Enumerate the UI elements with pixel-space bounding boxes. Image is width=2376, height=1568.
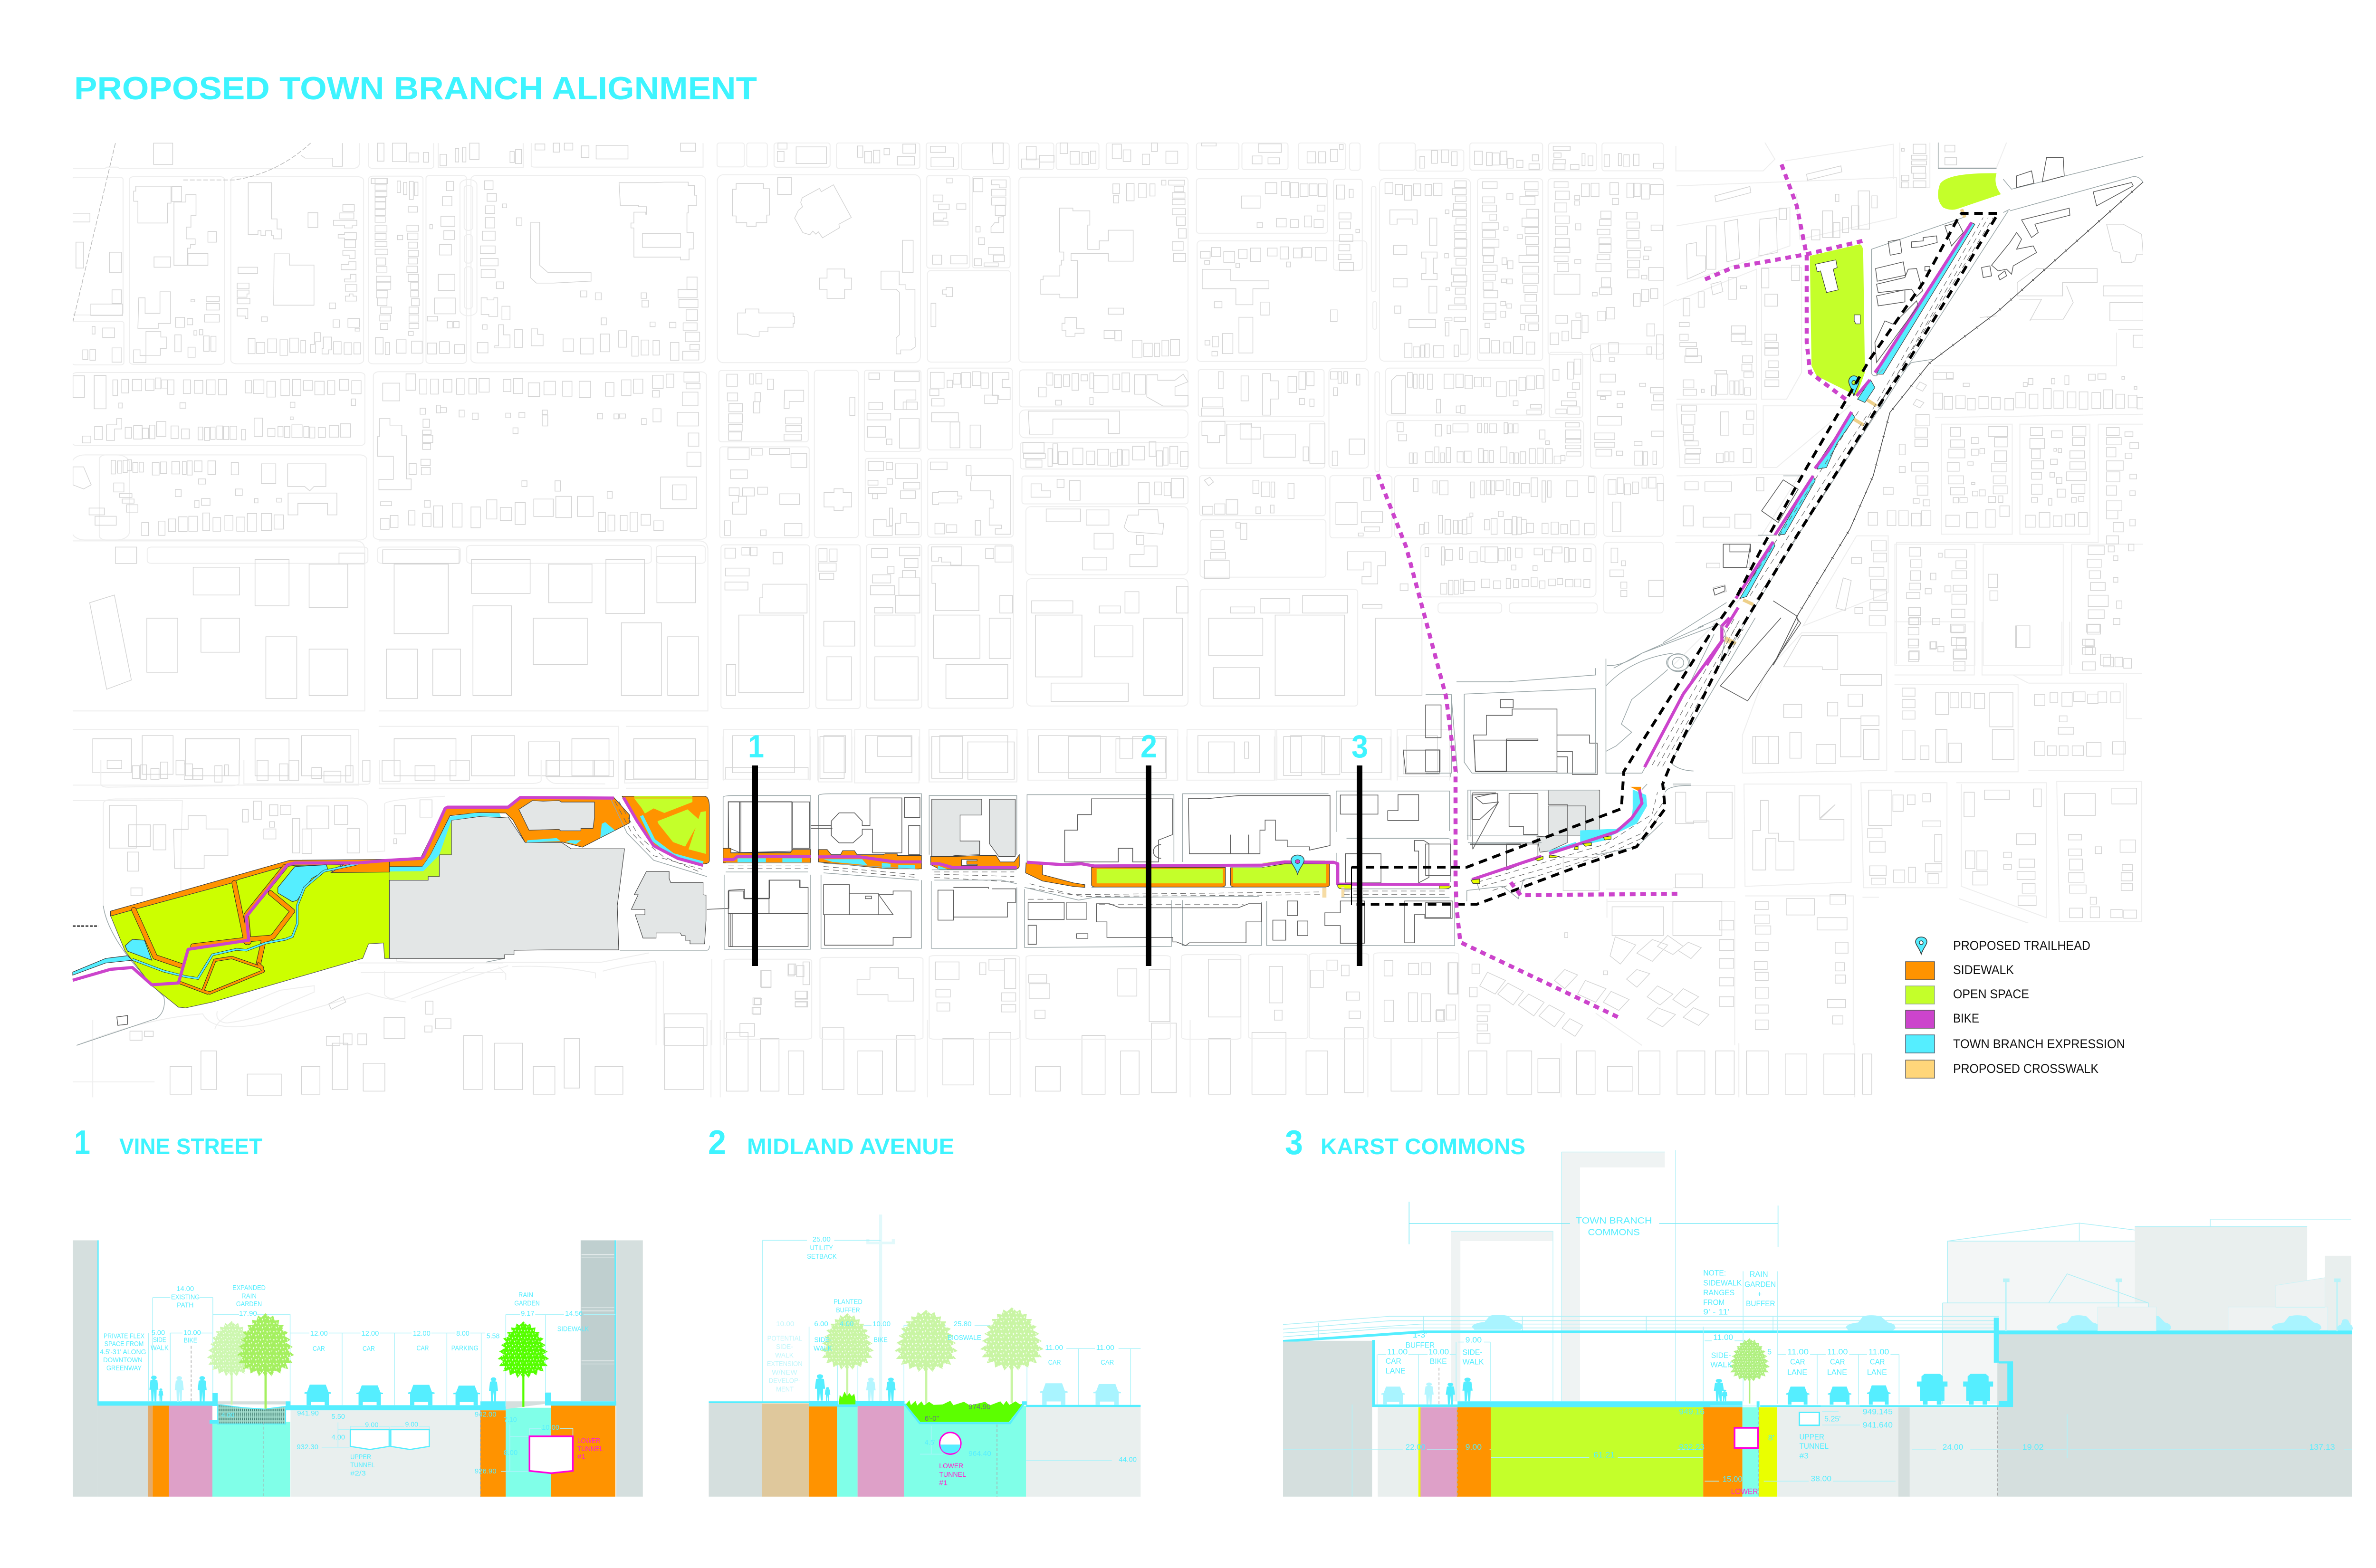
- dimension lines: [1283, 1271, 2352, 1497]
- section cut line 2: 2: [1140, 728, 1157, 765]
- labels and dimensions: WALK: [814, 1344, 832, 1352]
- labels and dimensions: 964.40: [968, 1449, 991, 1458]
- labels and dimensions: CAR: [313, 1345, 325, 1353]
- rain garden soil: [218, 1405, 286, 1424]
- labels and dimensions: EXPANDED: [232, 1284, 266, 1292]
- labels and dimensions: 5: [1767, 1348, 1772, 1356]
- bike path segments: [1706, 222, 1972, 665]
- bike path: Vine Street: [723, 857, 1017, 868]
- labels and dimensions: RANGES: [1703, 1288, 1734, 1297]
- labels and dimensions: [1386, 1216, 2335, 1496]
- open space: north park: [1938, 173, 2001, 210]
- legend: open space: OPEN SPACE: [1953, 987, 2029, 1001]
- labels and dimensions: SIDEWALK: [557, 1325, 589, 1333]
- labels and dimensions: PLANTED: [834, 1298, 862, 1306]
- labels and dimensions: EXISTING: [171, 1293, 200, 1301]
- context: blocks and buildings, east-middle: [1197, 143, 1663, 706]
- labels and dimensions: BIKE: [1430, 1357, 1447, 1366]
- legend: sidewalk: [1906, 962, 2014, 980]
- context: blocks and buildings, corridor north and south rows: [723, 736, 1459, 1039]
- trailhead pin: north-east: [1849, 376, 1859, 396]
- background buildings: [1451, 1150, 2351, 1404]
- block outlines: [723, 790, 1521, 949]
- labels and dimensions: PATH: [177, 1301, 193, 1309]
- labels and dimensions: 8.00: [456, 1329, 469, 1338]
- people: [149, 1376, 498, 1402]
- open space: large park: [111, 862, 389, 1008]
- street lamps: [2003, 1279, 2341, 1331]
- town branch: east curve: [1548, 790, 1647, 854]
- labels and dimensions: WALK: [151, 1344, 169, 1352]
- labels and dimensions: COMMONS: [1588, 1227, 1640, 1237]
- labels and dimensions: UTILITY: [810, 1243, 833, 1252]
- town branch segments: [1740, 222, 1975, 599]
- labels and dimensions: 949.16: [1679, 1407, 1705, 1416]
- proposed trail connections: magenta dotted: [1378, 164, 1867, 1019]
- labels and dimensions: 11.00: [1787, 1348, 1809, 1356]
- labels and dimensions: 4.5'-31' ALONG: [100, 1348, 146, 1356]
- trailhead pin: Midland: [1291, 855, 1304, 874]
- legend: bike: [1906, 1010, 1979, 1028]
- labels and dimensions: 10.00: [183, 1329, 201, 1337]
- labels and dimensions: TUNNEL: [577, 1445, 603, 1453]
- labels and dimensions: DOWNTOWN: [103, 1356, 143, 1364]
- labels and dimensions: CAR: [363, 1345, 375, 1353]
- sidewalk: Vine Street blocks: [723, 848, 1019, 869]
- trees: [821, 1307, 1044, 1404]
- town branch: upper channel: [389, 813, 501, 871]
- labels and dimensions: CAR: [1790, 1358, 1805, 1367]
- section heading 2: 2: [708, 1124, 726, 1162]
- road lanes: [1722, 218, 1993, 656]
- railway line: [1773, 182, 2143, 665]
- context: gap areas, estimated blocks: [73, 541, 1872, 1097]
- labels and dimensions: LANE: [1787, 1368, 1807, 1377]
- labels and dimensions: 11.00: [1045, 1343, 1063, 1351]
- section heading 1: VINE STREET: [119, 1134, 262, 1159]
- corridor buildings: [728, 740, 1521, 947]
- upper deck cars: [1472, 1315, 2353, 1330]
- bike path: west park: [73, 797, 614, 985]
- context: blocks and buildings, north-east: [1663, 143, 2143, 665]
- town branch: notch pools: [527, 822, 615, 844]
- labels and dimensions: 941.90: [297, 1409, 319, 1417]
- labels and dimensions: GARDEN: [236, 1300, 262, 1308]
- labels and dimensions: 25.80: [954, 1319, 971, 1328]
- labels and dimensions: 12.00: [310, 1329, 328, 1338]
- context: blocks and buildings, east: [1436, 618, 2142, 1045]
- grey buildings: [1537, 790, 1600, 852]
- labels and dimensions: RAIN: [241, 1292, 257, 1300]
- open space: Midland bioswale lawns: [1097, 860, 1326, 883]
- street surface: [709, 1401, 1140, 1407]
- labels and dimensions: +: [1757, 1290, 1762, 1299]
- road lanes: [1477, 618, 1746, 890]
- labels and dimensions: 5.00: [152, 1329, 165, 1337]
- section cut line 2: [1140, 728, 1157, 966]
- cross-section 3: Karst Commons: 137.13: [2309, 1443, 2335, 1452]
- labels and dimensions: LANE: [1386, 1367, 1406, 1376]
- labels and dimensions: 11.00: [1096, 1343, 1114, 1351]
- proposed crosswalks: [1322, 887, 1344, 898]
- tunnels: [1800, 1413, 1820, 1425]
- labels and dimensions: #1: [939, 1479, 948, 1487]
- title: PROPOSED TOWN BRANCH ALIGNMENT: [74, 70, 757, 106]
- labels and dimensions: 10.00: [542, 1424, 559, 1432]
- labels and dimensions: RAIN: [1750, 1270, 1768, 1279]
- section heading 1: [74, 1124, 262, 1162]
- open space: wedge plaza lawns: [634, 796, 706, 854]
- labels and dimensions: 11.00: [1868, 1348, 1889, 1356]
- street surface: [97, 1240, 616, 1410]
- cars: [305, 1385, 480, 1405]
- labels and dimensions: 9' - 11': [1703, 1308, 1730, 1316]
- legend: proposed trailhead: [1916, 937, 2090, 954]
- labels and dimensions: TUNNEL: [1800, 1442, 1829, 1451]
- labels and dimensions: CAR: [1830, 1358, 1845, 1367]
- labels and dimensions: 5.25': [1824, 1415, 1840, 1423]
- section cut line 3: 3: [1351, 728, 1368, 765]
- labels and dimensions: SIDEWALK: [1703, 1279, 1742, 1287]
- labels and dimensions: SIDE-: [1463, 1348, 1483, 1357]
- labels and dimensions: CAR: [1101, 1358, 1114, 1367]
- utility pole: [866, 1214, 895, 1401]
- labels and dimensions: SIDE-: [1711, 1351, 1731, 1360]
- grey buildings: [932, 799, 1015, 860]
- labels and dimensions: TUNNEL: [350, 1461, 375, 1469]
- labels and dimensions: DEVELOP-: [769, 1377, 800, 1385]
- bike path: Midland: [1027, 862, 1449, 885]
- building outlines in corridor: [707, 802, 808, 947]
- labels and dimensions: BUFFER: [1746, 1300, 1775, 1308]
- labels and dimensions: 4.00: [221, 1411, 234, 1419]
- labels and dimensions: 9.00: [1466, 1443, 1482, 1452]
- people: [1424, 1377, 1727, 1405]
- labels and dimensions: 9.00: [1466, 1336, 1482, 1344]
- section cut line 1: [748, 728, 764, 966]
- map: north-east linear segment: [1663, 143, 2143, 671]
- section ground bands: [1283, 1334, 2352, 1497]
- labels and dimensions: 44.00: [1119, 1455, 1137, 1463]
- labels and dimensions: LOWER: [577, 1437, 600, 1445]
- labels and dimensions: LOWER: [1731, 1487, 1758, 1496]
- labels and dimensions: CAR: [1386, 1357, 1401, 1366]
- section heading 2: [708, 1124, 954, 1162]
- labels and dimensions: [100, 1284, 603, 1477]
- map: proposed alignment plan: [72, 143, 2145, 1099]
- white panel behind legend: [1874, 923, 2145, 1099]
- dimension lines: [149, 1298, 615, 1472]
- sidewalk: corner: [1630, 787, 1641, 792]
- labels and dimensions: 10.00: [872, 1319, 891, 1328]
- labels and dimensions: 941.640: [1863, 1421, 1893, 1429]
- labels and dimensions: 932.23: [1679, 1443, 1705, 1452]
- labels and dimensions: UPPER: [1800, 1433, 1824, 1441]
- labels and dimensions: SIDE: [153, 1336, 166, 1344]
- labels and dimensions: TUNNEL: [939, 1470, 966, 1479]
- labels and dimensions: 8.00: [504, 1449, 517, 1457]
- labels and dimensions: WALK: [1710, 1360, 1733, 1369]
- labels and dimensions: BUFFER: [836, 1306, 860, 1314]
- map: midland corridor: [723, 740, 1521, 949]
- labels and dimensions: 12.00: [361, 1329, 379, 1338]
- labels and dimensions: CAR: [1870, 1358, 1885, 1367]
- labels and dimensions: 9.00: [365, 1421, 379, 1429]
- labels and dimensions: 926.90: [475, 1467, 497, 1475]
- labels and dimensions: 9.17: [521, 1310, 535, 1318]
- labels and dimensions: #3: [1800, 1452, 1809, 1460]
- cars: [1040, 1383, 1121, 1405]
- labels and dimensions: 15.00: [1723, 1475, 1743, 1483]
- trees: [207, 1313, 549, 1409]
- section heading 3: KARST COMMONS: [1321, 1134, 1525, 1159]
- legend: sidewalk: SIDEWALK: [1953, 963, 2014, 977]
- sidewalk: upper corridor: [389, 797, 629, 867]
- labels and dimensions: #1: [577, 1453, 585, 1461]
- sidewalk notch: [962, 860, 977, 866]
- labels and dimensions: 6.00: [814, 1319, 828, 1328]
- tunnels: [350, 1430, 429, 1450]
- labels and dimensions: 11.00: [1713, 1333, 1733, 1342]
- labels and dimensions: SIDE-: [776, 1342, 793, 1351]
- labels and dimensions: 12.00: [413, 1329, 431, 1338]
- context: blocks and buildings, west corridor: [73, 760, 807, 1045]
- labels and dimensions: GREENWAY: [106, 1364, 142, 1372]
- labels and dimensions: GARDEN: [514, 1300, 540, 1307]
- yellow curb extensions: [1338, 885, 1451, 889]
- labels and dimensions: 11.00: [1827, 1348, 1848, 1356]
- labels and dimensions: WALK: [1463, 1358, 1484, 1367]
- roads and roundabout: [1426, 626, 1714, 901]
- labels and dimensions: 974.90: [968, 1403, 991, 1411]
- labels and dimensions: 5.50: [332, 1413, 345, 1421]
- legend: bike: BIKE: [1953, 1011, 1979, 1025]
- bike path: east curve: [1472, 618, 1730, 880]
- road: curved lanes: [615, 801, 702, 873]
- town branch: ponds and stream: [73, 865, 328, 975]
- section ground bands: [709, 1403, 1140, 1497]
- labels and dimensions: CAR: [417, 1344, 429, 1352]
- labels and dimensions: LANE: [1867, 1368, 1887, 1377]
- labels and dimensions: FROM: [1703, 1298, 1725, 1307]
- section cut line 3: [1351, 728, 1368, 966]
- legend: proposed crosswalk: [1906, 1060, 2098, 1078]
- labels and dimensions: #2/3: [350, 1470, 366, 1477]
- town branch: Vine Street channel: [738, 858, 947, 869]
- tree: [1729, 1338, 1770, 1404]
- labels and dimensions: 4.5': [925, 1438, 936, 1446]
- sidewalk: wedge plaza: [622, 796, 709, 864]
- labels and dimensions: 1-3': [1413, 1330, 1427, 1339]
- labels and dimensions: RAIN: [518, 1291, 533, 1299]
- labels and dimensions: EXTENSION: [767, 1359, 803, 1368]
- cross-section 2: Midland Avenue: [709, 1214, 1140, 1497]
- sidewalk: park band and paths: [111, 860, 389, 916]
- labels and dimensions: 8': [1768, 1434, 1774, 1442]
- labels and dimensions: 949.145: [1863, 1407, 1893, 1416]
- labels and dimensions: 19.02: [2022, 1443, 2044, 1452]
- section cut line 1: 1: [748, 728, 764, 765]
- railway spur west: [73, 143, 311, 321]
- legend: town branch expression: TOWN BRANCH EXPRESSION: [1953, 1037, 2125, 1051]
- section heading 3: 3: [1285, 1124, 1303, 1162]
- black building outlines: [1426, 618, 1801, 918]
- dimension lines: [762, 1240, 1140, 1461]
- labels and dimensions: 22.00: [1406, 1443, 1426, 1452]
- upper deck lines: [1283, 1316, 1999, 1339]
- labels and dimensions: SETBACK: [807, 1252, 837, 1261]
- labels and dimensions: POTENTIAL: [767, 1334, 802, 1342]
- town branch: wedge channel: [642, 816, 703, 863]
- proposed crosswalks: [1724, 640, 1736, 645]
- labels and dimensions: W/NEW: [772, 1368, 797, 1376]
- labels and dimensions: TOWN BRANCH: [1576, 1216, 1652, 1225]
- labels and dimensions: 5.58: [487, 1332, 499, 1340]
- labels and dimensions: GARDEN: [1744, 1280, 1776, 1289]
- building: grey plaza block: [519, 801, 594, 831]
- labels and dimensions: NOTE:: [1703, 1269, 1726, 1278]
- labels and dimensions: 4.00: [332, 1434, 345, 1441]
- labels and dimensions: 14.00: [176, 1285, 194, 1293]
- labels and dimensions: CAR: [1048, 1358, 1061, 1367]
- labels and dimensions: WALK: [775, 1351, 794, 1359]
- labels and dimensions: 4.00: [840, 1319, 853, 1328]
- legend: open space: [1906, 986, 2029, 1004]
- labels and dimensions: 38.00: [1811, 1474, 1831, 1483]
- building: second grey block: [632, 871, 706, 944]
- labels and dimensions: 9.00: [405, 1421, 418, 1428]
- section heading 2: MIDLAND AVENUE: [747, 1134, 954, 1159]
- labels and dimensions: [767, 1235, 1137, 1487]
- people: [815, 1374, 896, 1401]
- labels and dimensions: MENT: [776, 1385, 794, 1393]
- legend: [1906, 937, 2125, 1078]
- labels and dimensions: 25.00: [813, 1235, 831, 1243]
- map: east curve: [1426, 618, 1801, 918]
- lower tunnel: [939, 1433, 961, 1454]
- section ground and utility bands: [73, 1240, 643, 1497]
- labels and dimensions: 7.10: [504, 1416, 517, 1424]
- labels and dimensions: LOWER: [939, 1462, 963, 1470]
- labels and dimensions: UPPER: [350, 1453, 371, 1461]
- context: blocks and buildings, west: [72, 143, 707, 564]
- yellow curb extensions: [1471, 836, 1611, 884]
- labels and dimensions: 24.00: [1943, 1443, 1963, 1452]
- labels and dimensions: 6'-0": [925, 1414, 939, 1423]
- labels and dimensions: PRIVATE FLEX: [104, 1332, 144, 1340]
- labels and dimensions: 942.00: [475, 1411, 497, 1418]
- open space: main park: [1810, 244, 1865, 396]
- section heading 3: [1285, 1124, 1525, 1162]
- park buildings: [1816, 260, 1860, 324]
- context: blocks and buildings, middle: [717, 143, 1188, 708]
- sidewalk: Midland bioswale edge: [1092, 864, 1330, 887]
- street level cars and buses: [1381, 1374, 1993, 1405]
- labels and dimensions: 11.00: [1387, 1348, 1408, 1356]
- section heading 1: 1: [74, 1124, 90, 1162]
- building: large grey block: [389, 817, 624, 958]
- open space: strip beside arena: [389, 820, 451, 880]
- labels and dimensions: BUFFER: [1406, 1341, 1435, 1349]
- labels and dimensions: 10.00: [776, 1319, 794, 1328]
- cross-section 1: Vine Street: [73, 1240, 643, 1497]
- labels and dimensions: 10.00: [1428, 1348, 1449, 1356]
- legend: proposed crosswalk: PROPOSED CROSSWALK: [1953, 1061, 2098, 1076]
- labels and dimensions: PARKING: [451, 1344, 479, 1352]
- legend: town branch expression: [1906, 1035, 2125, 1053]
- labels and dimensions: BIKE: [873, 1336, 888, 1344]
- labels and dimensions: 932.30: [297, 1443, 318, 1451]
- labels and dimensions: BIOSWALE: [948, 1333, 981, 1342]
- rain garden east: [506, 1401, 545, 1409]
- cross-section 3: Karst Commons: [1283, 1150, 2353, 1497]
- labels and dimensions: 17.90: [239, 1310, 257, 1318]
- labels and dimensions: BIKE: [184, 1337, 197, 1344]
- proposed crosswalks: [1725, 209, 1965, 643]
- upper deck road: [1283, 1318, 2352, 1407]
- labels and dimensions: SIDE-: [814, 1336, 832, 1344]
- map: Vine Street west park and alignment: [73, 796, 808, 1008]
- planted buffer grass: [839, 1392, 856, 1405]
- legend: proposed trailhead: PROPOSED TRAILHEAD: [1953, 938, 2090, 953]
- labels and dimensions: 14.56: [565, 1310, 583, 1318]
- proposed trail connections: black dashed corridors: [1351, 213, 1998, 905]
- bike path: wedge plaza: [623, 797, 703, 865]
- bioswale planting: [906, 1400, 1023, 1422]
- road lanes: [728, 866, 1447, 905]
- labels and dimensions: SPACE FROM: [105, 1340, 144, 1348]
- labels and dimensions: LANE: [1827, 1368, 1847, 1377]
- labels and dimensions: 61.21: [1593, 1451, 1615, 1459]
- black building outlines: [1713, 158, 2133, 665]
- sidewalk: Midland south edge: [1025, 863, 1085, 888]
